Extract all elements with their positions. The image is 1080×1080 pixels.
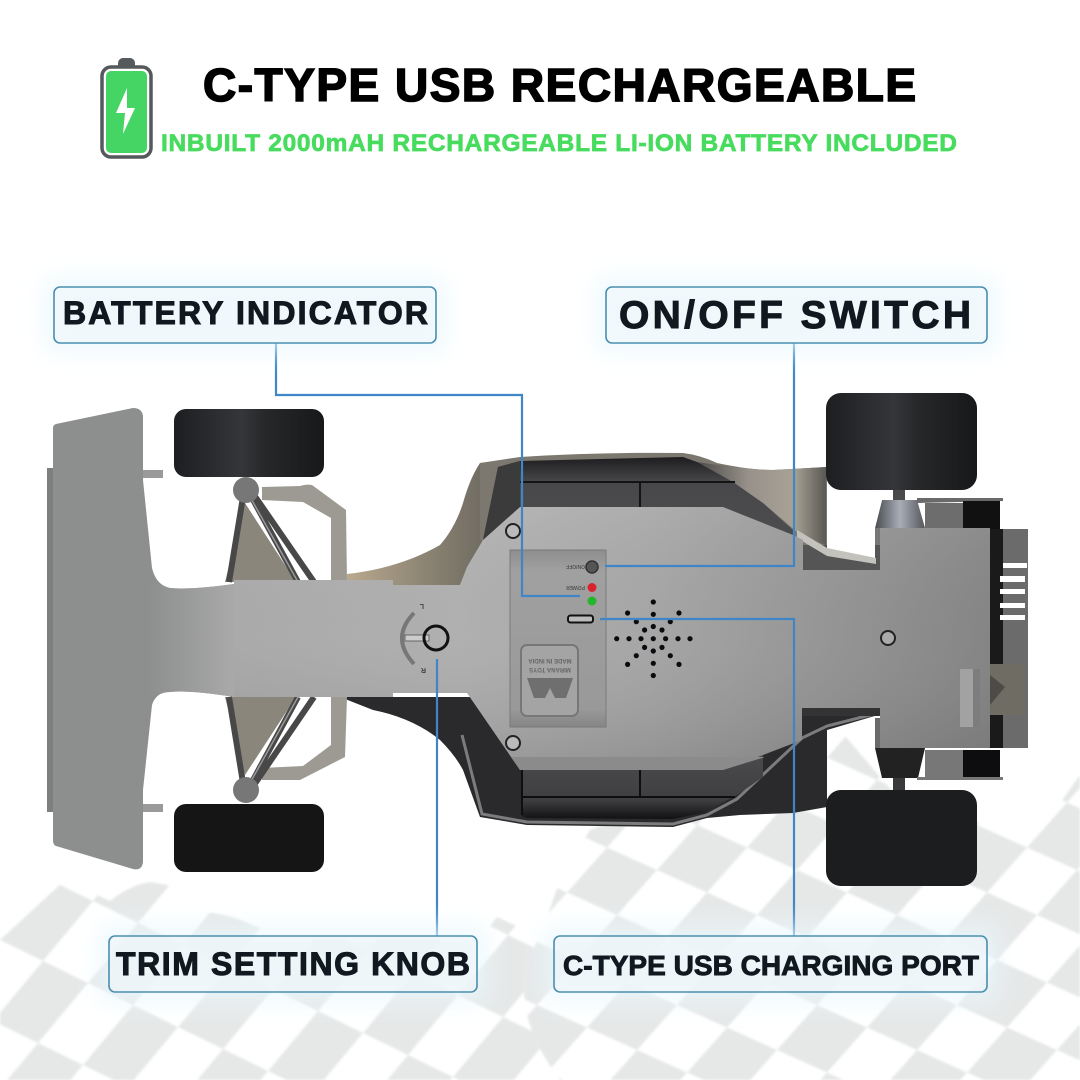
callout line: trim knob: [436, 659, 438, 936]
speaker holes: [614, 599, 693, 678]
label: c-type usb charging port: C-TYPE USB CHARGING PORT: [563, 950, 979, 981]
control panel: POWER: [566, 584, 585, 590]
logo plate: [521, 645, 578, 716]
on/off button: [586, 561, 598, 573]
front tyres: [174, 409, 324, 872]
label: battery indicator: [54, 287, 436, 343]
front wing: [47, 408, 234, 869]
label: battery indicator: BATTERY INDICATOR: [63, 295, 428, 331]
callout line: on/off switch: [605, 343, 794, 566]
control panel: ON/OFF: [566, 563, 585, 569]
race car underside: [47, 393, 1028, 886]
chassis plate: [234, 507, 990, 770]
callout line: usb port: [600, 619, 794, 936]
label: c-type usb charging port: [554, 936, 987, 992]
rear tyres: [826, 393, 977, 886]
callout line: battery indicator: [276, 343, 580, 596]
label glow: [44, 278, 997, 1002]
label: on/off switch: ON/OFF SWITCH: [619, 294, 971, 337]
shell top: [480, 453, 827, 560]
logo plate: MADE IN INDIA: [528, 657, 572, 663]
title: C-TYPE USB RECHARGEABLE: [203, 59, 916, 111]
trim setting knob: L: [419, 602, 424, 609]
label: trim setting knob: [109, 936, 477, 992]
rear axle and gearbox parts: [875, 486, 1003, 792]
sidepod trays: [483, 457, 793, 819]
front suspension: [225, 477, 347, 803]
power LED: [588, 583, 596, 592]
trim setting knob: [402, 602, 448, 673]
full charge LED: [588, 596, 596, 606]
checkered flag background: [0, 730, 1080, 1080]
label: trim setting knob: TRIM SETTING KNOB: [116, 946, 470, 982]
logo plate: MIRANA TOYS: [529, 666, 571, 672]
usb port: [568, 616, 593, 622]
shell bottom ribbon: [462, 713, 878, 824]
screws: [506, 524, 895, 750]
white gap top: [827, 490, 893, 561]
icon: green battery: [102, 58, 151, 157]
control panel: [510, 550, 606, 727]
trim setting knob: R: [421, 666, 426, 673]
shell bottom: [340, 697, 880, 827]
car shell: [340, 453, 893, 827]
subtitle: INBUILT 2000mAH RECHARGEABLE LI-ION BATTERY INCLUDED: [161, 130, 957, 157]
shell top left band: [347, 462, 498, 585]
shell top right band: [697, 462, 826, 545]
rear diffuser fins: [990, 529, 1028, 748]
